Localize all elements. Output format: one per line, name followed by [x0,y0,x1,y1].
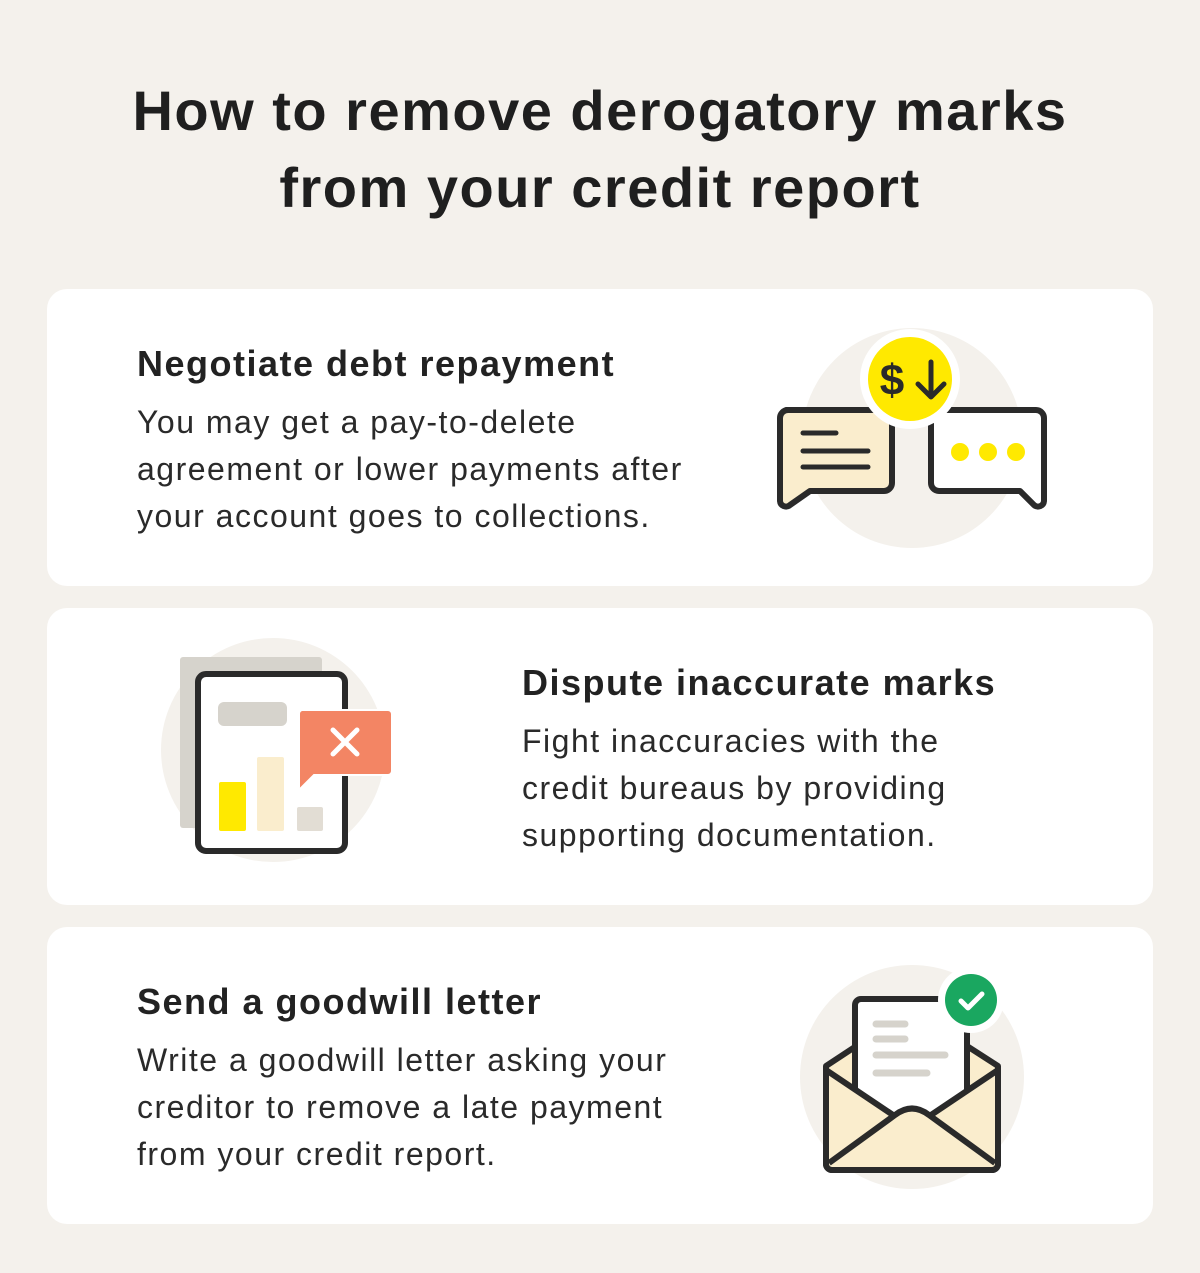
heading: goodwill: Send a goodwill letter [137,981,542,1022]
text: dispute: supporting documentation. [522,817,937,853]
title [132,79,1068,219]
text: negotiate: your account goes to collections. [137,498,651,534]
icon: envelope with letter and check [800,965,1024,1189]
text: negotiate [137,404,683,534]
text: dispute [522,723,947,853]
text: negotiate: You may get a pay-to-delete [137,404,577,440]
text: negotiate: agreement or lower payments after [137,451,683,487]
title: from your credit report [279,156,921,219]
icon: chat bubbles with dollar down: $ [880,356,904,405]
heading: dispute: Dispute inaccurate marks [522,662,996,703]
text: goodwill: Write a goodwill letter asking your [137,1042,667,1078]
title: How to remove derogatory marks [132,79,1068,142]
panel: negotiate [47,289,1153,586]
icon: chat bubbles with dollar down [777,328,1047,548]
text: goodwill: from your credit report. [137,1136,497,1172]
panel: goodwill [47,927,1153,1224]
text: dispute: credit bureaus by providing [522,770,947,806]
heading: negotiate: Negotiate debt repayment [137,343,615,384]
text: dispute: Fight inaccuracies with the [522,723,940,759]
panel: dispute [47,608,1153,905]
text: goodwill [137,1042,667,1172]
icon: document with chart and x [161,638,391,862]
text: goodwill: creditor to remove a late payment [137,1089,663,1125]
